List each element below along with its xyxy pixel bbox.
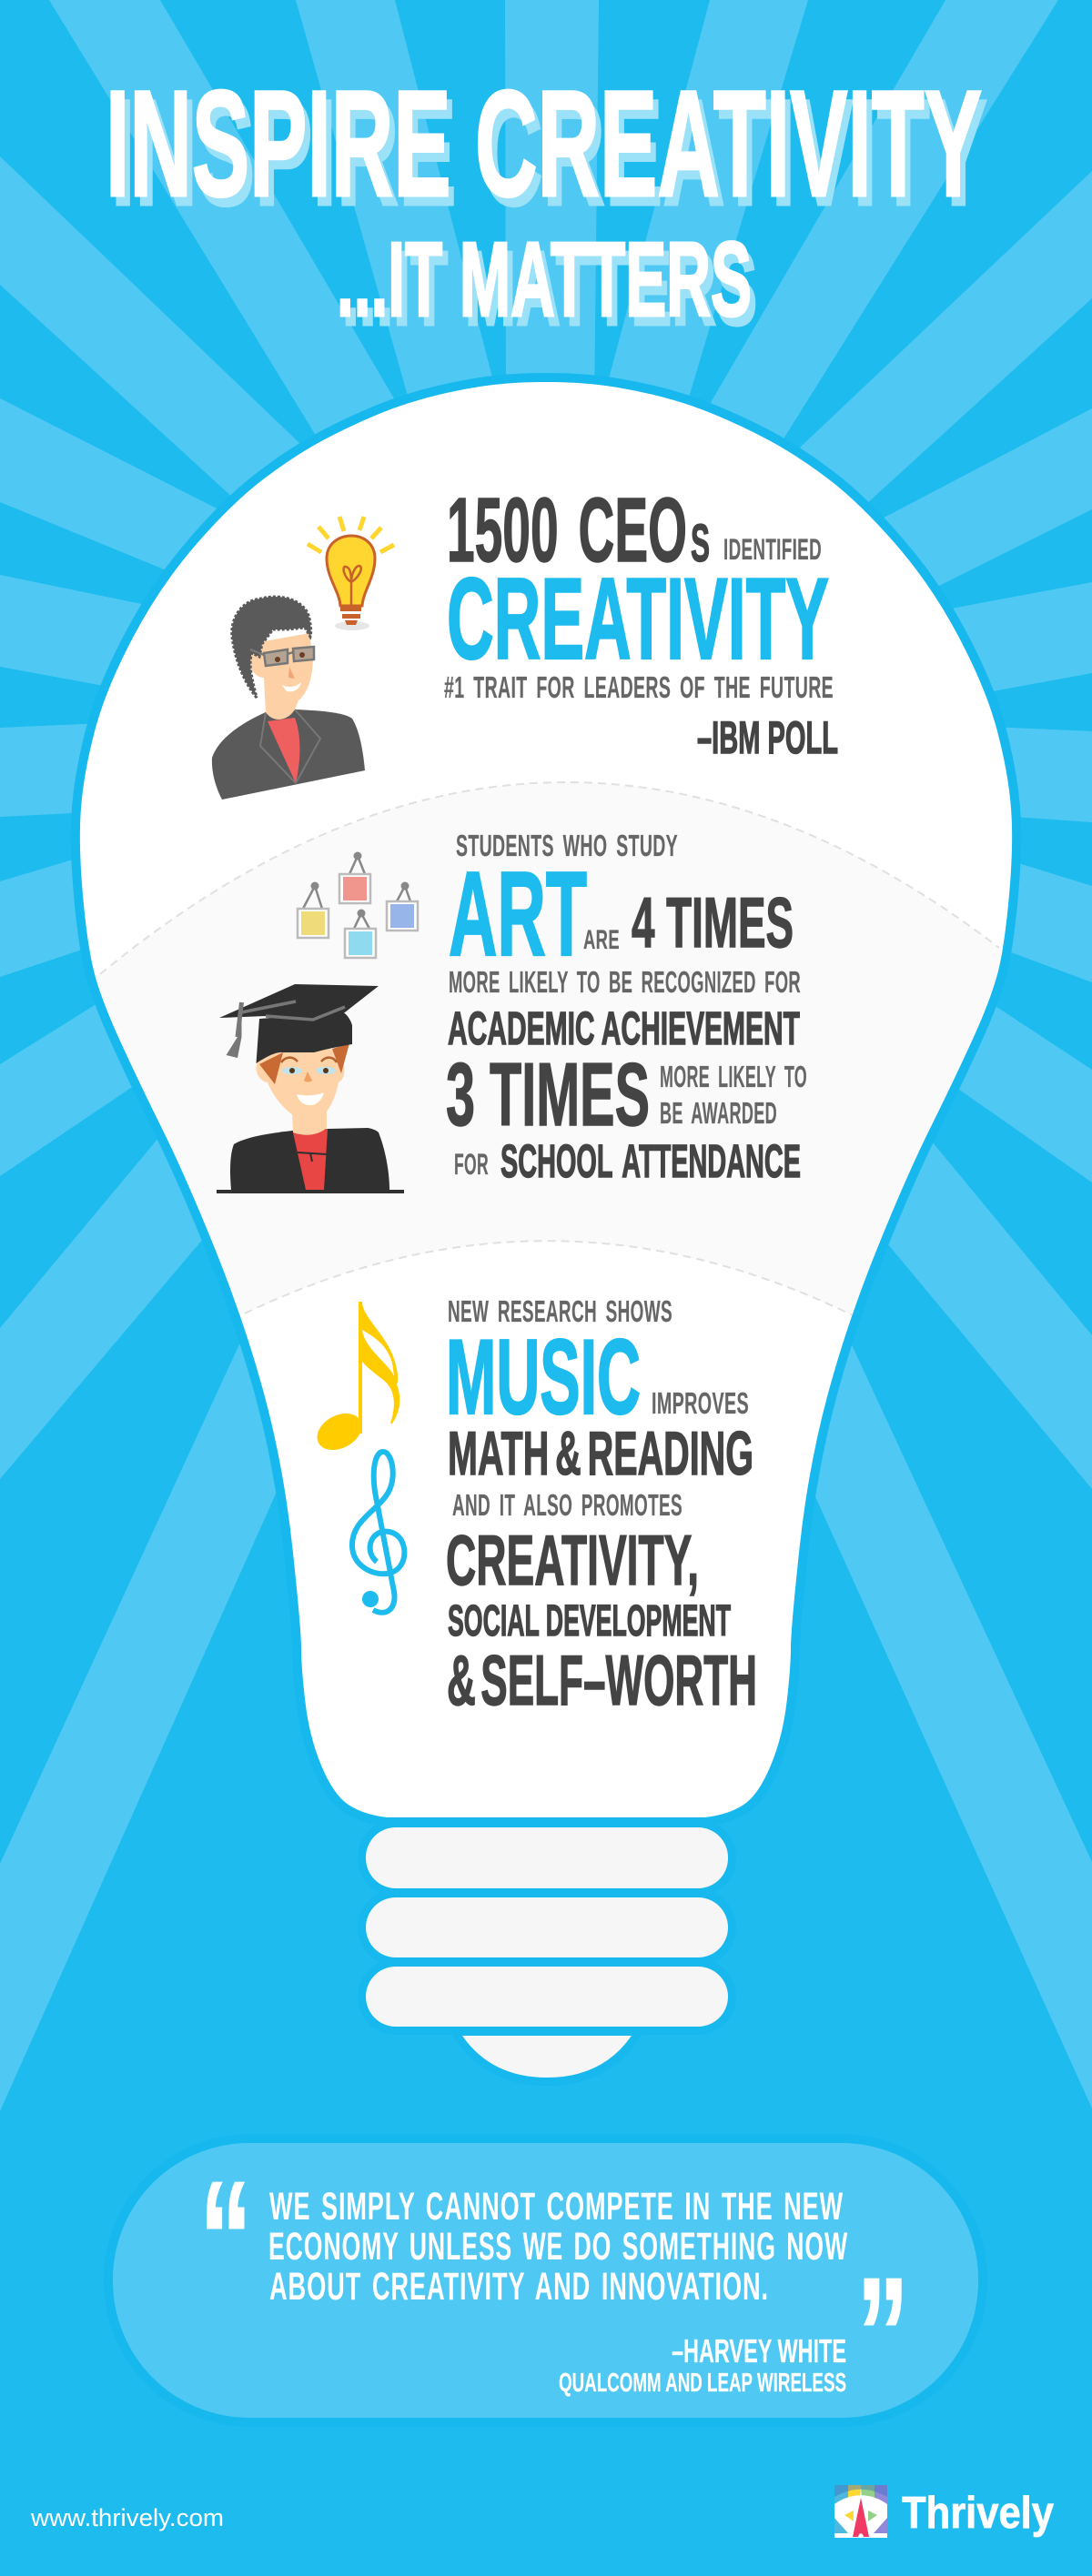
text: Thrively: Thrively [902, 2489, 1054, 2538]
text: new research shows: NEW RESEARCH SHOWS [448, 1294, 672, 1328]
title: ...IT MATTERS [342, 229, 757, 347]
icon: closing quote mark: ” [856, 2244, 909, 2427]
icon: opening quote mark: “ [199, 2148, 252, 2330]
text: for: FOR [454, 1148, 489, 1181]
logo: Thrively [834, 2485, 1054, 2538]
text: self-worth: & SELF–WORTH [447, 1640, 757, 1720]
icon: music note [311, 1302, 399, 1457]
icon: graduate [217, 984, 404, 1193]
title [106, 60, 987, 347]
light bulb base [366, 1827, 728, 2078]
text: source: –IBM POLL [697, 712, 838, 763]
icon: hanging art frames [298, 851, 418, 958]
icon: businessman [212, 597, 365, 800]
text: academic achievement: ACADEMIC ACHIEVEMENT [448, 1002, 800, 1054]
text: and it also promotes: AND IT ALSO PROMOTES [452, 1488, 682, 1522]
text: art: ART [449, 847, 587, 981]
text: school attendance: SCHOOL ATTENDANCE [500, 1135, 801, 1187]
screw ring 1 [366, 1827, 728, 1888]
text: be awarded: BE AWARDED [660, 1096, 777, 1130]
text: trait: #1 TRAIT FOR LEADERS OF THE FUTURE [444, 670, 834, 704]
bulb base tip [462, 2036, 632, 2078]
text: more likely to: MORE LIKELY TO [660, 1060, 807, 1093]
text: creativity: CREATIVITY, [446, 1520, 699, 1600]
text: math and reading: MATH & READING [448, 1419, 753, 1488]
text: plural s: S [691, 514, 710, 573]
text: 4 times: 4 TIMES [632, 882, 794, 962]
text: more likely recognized: MORE LIKELY TO BE RECOGNIZED FOR [449, 965, 801, 999]
title: ...IT MATTERS [337, 220, 752, 338]
glasses [250, 647, 314, 666]
text: identified: IDENTIFIED [723, 533, 822, 566]
text: quote [268, 2185, 848, 2309]
icon: small light bulb [308, 517, 394, 630]
text: students who study: STUDENTS WHO STUDY [456, 829, 678, 862]
panel: art band background [95, 781, 1003, 1316]
panel: CEO creativity [212, 479, 838, 800]
panel: quote [113, 2143, 978, 2427]
text: music: MUSIC [446, 1317, 641, 1436]
text: attribution company: QUALCOMM AND LEAP WIRELESS [559, 2369, 846, 2398]
website url: www.thrively.com [30, 2504, 224, 2531]
quote bubble [113, 2143, 978, 2418]
text: quote: ABOUT CREATIVITY AND INNOVATION. [269, 2265, 769, 2309]
icon: treble clef [352, 1452, 404, 1613]
screw ring 2 [366, 1897, 728, 1957]
text: improves: IMPROVES [652, 1386, 749, 1420]
text: 3 times: 3 TIMES [446, 1044, 650, 1144]
light bulb glass [80, 382, 1012, 1817]
panel: music [311, 1294, 757, 1720]
screw ring 3 [366, 1967, 728, 2027]
panel: art students [217, 829, 807, 1193]
icon: logo mark [834, 2485, 887, 2538]
text: attribution name: –HARVEY WHITE [672, 2332, 846, 2370]
text: social development: SOCIAL DEVELOPMENT [448, 1597, 731, 1645]
text: are: ARE [583, 925, 620, 955]
text: 1500 CEOs: 1500 CEO [447, 479, 687, 581]
